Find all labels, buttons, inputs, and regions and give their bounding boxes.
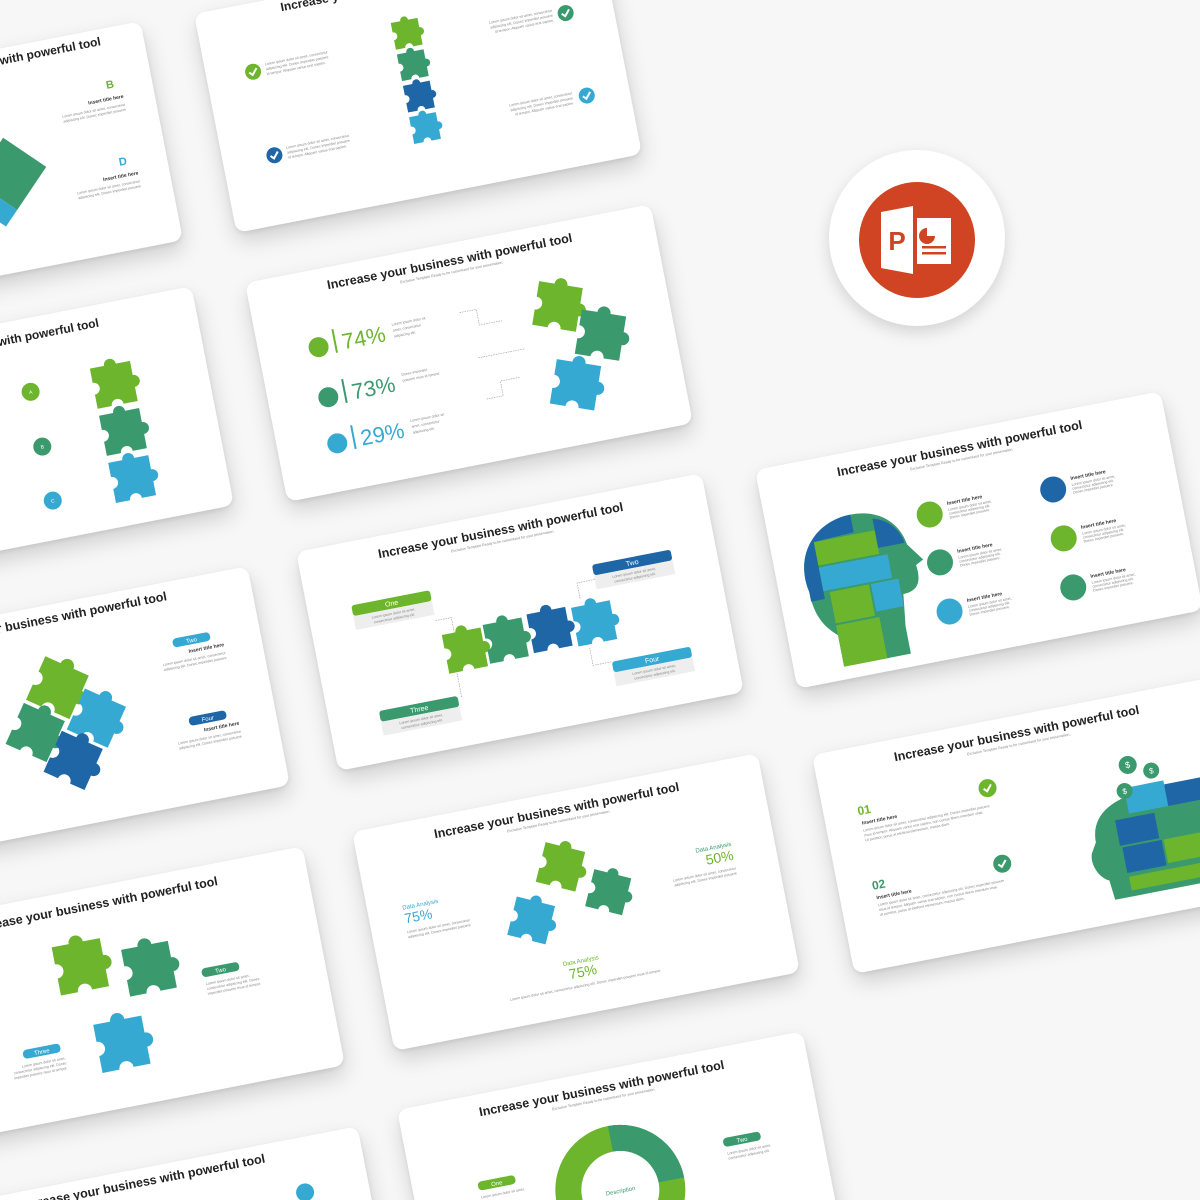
puzzle stack — [390, 13, 445, 144]
labels: Two — [625, 559, 639, 568]
labels — [477, 1126, 772, 1200]
texts: Lorem ipsum dolor sit amet, consectetur — [489, 9, 553, 25]
title: Increase your business with powerful tool — [377, 500, 624, 561]
circles A B C: C — [51, 498, 56, 505]
left stat: Data Analysis — [402, 899, 439, 912]
slide 9: piggy bank: Exclusive Template Ready to be customized for your presentation. — [967, 732, 1071, 756]
texts: Lorem ipsum dolor sit amet, consectetur — [265, 50, 329, 66]
labels: Two — [186, 637, 198, 645]
slide 10: Two Three — [0, 846, 345, 1144]
labels: consectetur adipiscing elit. — [634, 669, 676, 681]
connectors — [460, 302, 533, 401]
item 01: 01 — [856, 802, 872, 818]
items: Lorem ipsum dolor sit amet, — [968, 596, 1012, 609]
bottom stat — [505, 944, 662, 1002]
texts: Lorem ipsum dolor sit amet, consectetur — [509, 91, 573, 107]
texts: id tempor. Aliquam varius erat sapien. — [288, 144, 347, 160]
labels: Four — [645, 656, 661, 665]
ring: Description — [605, 1186, 636, 1198]
items: Lorem ipsum dolor sit amet, — [1082, 523, 1126, 536]
item B: adipiscing elit. Donec imperdiet posuere — [63, 108, 126, 124]
ring — [559, 1129, 681, 1200]
items: Insert title here — [957, 542, 993, 555]
stat 74%: amet, consectetur — [392, 323, 422, 333]
item D: Insert title here — [103, 170, 139, 183]
right stat: Data Analysis — [695, 842, 732, 855]
item 02: Insert title here — [876, 888, 913, 901]
puzzle chain — [440, 592, 623, 674]
labels: Lorem ipsum dolor sit amet, — [481, 1187, 525, 1199]
labels: Three — [410, 705, 429, 715]
stat 29%: amet, consectetur — [411, 419, 441, 429]
title: Increase your business with powerful tool — [836, 418, 1083, 479]
labels: Two — [736, 1137, 749, 1145]
stat 74%: Lorem ipsum dolor sit — [391, 316, 426, 327]
texts: adipiscing elit. Donec imperdiet posuere — [510, 96, 573, 112]
stat 29%: adipiscing elit. — [412, 426, 435, 435]
labels: consectetur adipiscing elit. Donec — [207, 977, 260, 991]
slide 1: B D partial — [0, 21, 183, 319]
stat 73%: Donec imperdiet — [401, 368, 427, 377]
item D — [72, 154, 142, 200]
labels: Lorem ipsum dolor sit amet, — [399, 713, 443, 725]
texts: Lorem ipsum dolor sit amet, consectetur — [286, 134, 350, 150]
items: Insert title here — [966, 591, 1003, 604]
bottom stat: Data Analysis — [563, 955, 599, 968]
items: consectetur adipiscing elit. — [1083, 528, 1125, 540]
labels: Lorem ipsum dolor sit amet, — [371, 607, 416, 620]
coins: $ — [1148, 766, 1155, 776]
labels — [1, 958, 270, 1080]
items: Insert title here — [1080, 518, 1117, 531]
items: consectetur adipiscing elit. — [968, 601, 1011, 613]
coins — [1110, 750, 1163, 800]
title: Increase your business with powerful tool — [326, 231, 573, 292]
stat 73% — [316, 361, 443, 411]
item 02 — [871, 854, 1006, 917]
labels: Four — [201, 715, 215, 724]
labels: Lorem ipsum dolor sit amet, — [632, 664, 676, 676]
items: consectetur adipiscing elit. — [1092, 577, 1134, 589]
item 01: Ut porttitor, purus at eleifend elementum, massa diam. — [865, 822, 950, 842]
item 01: risus id tempor. Aliquam varius erat sapien, non cursus libero interdum vitae. — [864, 810, 984, 837]
labels: One — [385, 599, 399, 609]
bottom stat: 75% — [568, 961, 598, 982]
texts: adipiscing elit. Donec imperdiet posuere — [265, 55, 329, 71]
labels: consectetur adipiscing elit. Donec — [14, 1061, 67, 1075]
coins: $ — [1124, 760, 1131, 770]
item B: Lorem ipsum dolor sit amet, consectetur — [62, 103, 126, 119]
texts: adipiscing elit. Donec imperdiet posuere — [490, 14, 553, 30]
checks — [977, 778, 1013, 874]
items: Insert title here — [1070, 469, 1106, 482]
right stat: Lorem ipsum dolor sit amet, consectetur — [673, 866, 737, 883]
labels: adipiscing elit. Donec imperdiet posuere — [179, 734, 242, 751]
labels: One — [491, 1180, 504, 1188]
items: Donec imperdiet posuere. — [1093, 581, 1134, 593]
labels — [158, 629, 243, 751]
labels: consectetur adipiscing elit. — [373, 612, 416, 624]
puzzle cluster — [490, 821, 648, 954]
stat 74%: adipiscing elit. — [394, 330, 417, 339]
texts: id tempor. Aliquam varius erat sapien. — [495, 18, 554, 34]
labels: imperdiet posuere risus id tempor. — [207, 982, 261, 996]
stat 29% — [325, 408, 448, 457]
stat 74%: 74% — [340, 321, 388, 354]
texts: id tempor. Aliquam varius erat sapien. — [515, 101, 574, 117]
item 02: Lorem ipsum dolor sit amet, consectetur adipiscing elit. Donec imperdiet posuere — [877, 879, 1005, 907]
items: Insert title here — [946, 494, 983, 507]
labels: Lorem ipsum dolor sit amet, — [206, 974, 250, 986]
items: consectetur adipiscing elit. — [1072, 479, 1114, 491]
bottom stat: Lorem ipsum dolor sit amet, consectetur adipiscing elit. Donec imperdiet posuere risus id tempor. — [510, 969, 662, 1002]
circles A B C: A — [29, 389, 34, 396]
stat 74% — [306, 311, 429, 361]
labels: adipiscing elit. Donec imperdiet posuere — [164, 656, 227, 672]
right stat — [668, 842, 738, 887]
slide 2: vertical puzzle stack with checks — [194, 0, 642, 233]
slide 4: percentages — [245, 204, 693, 502]
stat 73%: posuere risus id tempor. — [402, 371, 441, 383]
slide 11: circle ring: Exclusive Template Ready to be customized for your presentation. — [552, 1087, 656, 1111]
left stat — [402, 893, 472, 939]
slide 11: circle ring — [397, 1031, 845, 1200]
labels: consectetur adipiscing elit. — [401, 718, 443, 730]
slide 5: head — [755, 391, 1200, 689]
items: Lorem ipsum dolor sit amet, — [958, 547, 1002, 560]
texts: id tempor. Aliquam varius erat sapien. — [266, 61, 326, 76]
items: Donec imperdiet posuere. — [1073, 483, 1114, 495]
title: Increase your business with powerful tool — [478, 1058, 725, 1119]
slide 6: One Two Three Four chain: Exclusive Template Ready to be customized for your presentation. — [451, 529, 555, 553]
labels: Insert title here — [188, 642, 225, 655]
labels: Lorem ipsum dolor sit amet, consectetur — [178, 729, 242, 746]
labels: Lorem ipsum dolor sit amet, — [22, 1056, 66, 1069]
left stat: 75% — [403, 905, 434, 926]
item B — [57, 77, 127, 124]
diamond — [0, 138, 46, 227]
items: consectetur adipiscing elit. — [959, 552, 1001, 564]
item 02: risus id tempor. Aliquam varius erat sapien, non cursus libero interdum vitae. — [878, 885, 998, 912]
items — [914, 464, 1138, 627]
items: Donec imperdiet posuere. — [949, 508, 990, 520]
labels: Two — [215, 967, 227, 975]
items: Donec imperdiet posuere. — [969, 605, 1010, 617]
left stat: Lorem ipsum dolor sit amet, consectetur — [407, 918, 471, 934]
slide 3: A B C stack — [0, 286, 234, 584]
items: Lorem ipsum dolor sit amet, — [1091, 572, 1136, 585]
items: consectetur adipiscing elit. — [949, 504, 991, 516]
right stat: 50% — [704, 847, 735, 868]
slide 12: bottom-left partial — [0, 1126, 400, 1200]
puzzle pieces — [523, 259, 651, 421]
head illustration — [795, 503, 940, 671]
item 01: Lorem ipsum dolor sit amet, consectetur adipiscing elit. Donec imperdiet posuere — [863, 804, 990, 833]
labels — [351, 543, 696, 737]
slide 8: Data Analysis: Exclusive Template Ready to be customized for your presentation. — [507, 809, 611, 833]
items: Insert title here — [1090, 567, 1127, 580]
icon: PowerPoint badge: P — [888, 226, 906, 256]
slide 5: head: Exclusive Template Ready to be customized for your presentation. — [910, 447, 1014, 471]
labels: consectetur adipiscing elit. — [728, 1149, 770, 1161]
item 01 — [856, 780, 992, 843]
stat 29%: 29% — [358, 418, 406, 451]
items: Lorem ipsum dolor sit amet, — [1071, 474, 1116, 487]
labels: Lorem ipsum dolor sit amet, consectetur — [162, 651, 227, 667]
items: Lorem ipsum dolor sit amet, — [948, 499, 992, 512]
slide 8: Data Analysis — [352, 753, 800, 1051]
labels: Insert title here — [204, 721, 240, 733]
slide 9: piggy bank — [812, 676, 1200, 974]
icon: PowerPoint badge — [829, 150, 1005, 326]
labels: Three — [34, 1048, 51, 1057]
coins: $ — [1122, 787, 1128, 796]
puzzles — [50, 917, 197, 1078]
item D: adipiscing elit. Donec imperdiet posuere — [78, 184, 141, 200]
texts — [265, 6, 575, 162]
slide 7: Two Four cluster — [0, 566, 290, 864]
item 02: 02 — [871, 876, 887, 893]
item D: Lorem ipsum dolor sit amet, consectetur — [77, 179, 141, 195]
texts: adipiscing elit. Donec imperdiet posuere — [287, 139, 350, 155]
circles A B C — [20, 381, 63, 511]
slide 6: One Two Three Four chain — [296, 473, 744, 771]
piggy bank — [1080, 768, 1200, 903]
item B: Insert title here — [88, 94, 124, 107]
right stat: adipiscing elit. Donec imperdiet posuere — [674, 871, 737, 887]
stat 73%: 73% — [349, 371, 397, 404]
item 01: Insert title here — [861, 814, 898, 827]
title: Increase your business with powerful tool — [893, 703, 1140, 764]
item 02: Ut porttitor, purus at eleifend elementum, massa diam. — [879, 897, 965, 917]
labels: Lorem ipsum dolor sit amet, — [612, 567, 656, 579]
items: Donec imperdiet posuere. — [1083, 532, 1124, 544]
stat 29%: Lorem ipsum dolor sit — [410, 412, 444, 423]
title: Increase your business with powerful tool — [433, 780, 680, 841]
labels: consectetur adipiscing elit. — [614, 572, 656, 584]
slide 4: percentages: Exclusive Template Ready to be customized for your presentation. — [400, 260, 504, 284]
item B: B — [105, 79, 115, 92]
circles A B C: B — [40, 444, 45, 451]
left stat: adipiscing elit. Donec imperdiet posuere — [408, 923, 471, 939]
checks — [244, 1, 596, 167]
puzzle cluster — [0, 636, 150, 807]
labels: imperdiet posuere risus id tempor. — [14, 1066, 68, 1080]
circle C — [295, 1182, 316, 1200]
puzzle stack — [89, 354, 162, 503]
labels: Lorem ipsum dolor sit amet, — [727, 1143, 771, 1156]
items: Donec imperdiet posuere. — [960, 556, 1001, 568]
item D: D — [118, 155, 128, 169]
